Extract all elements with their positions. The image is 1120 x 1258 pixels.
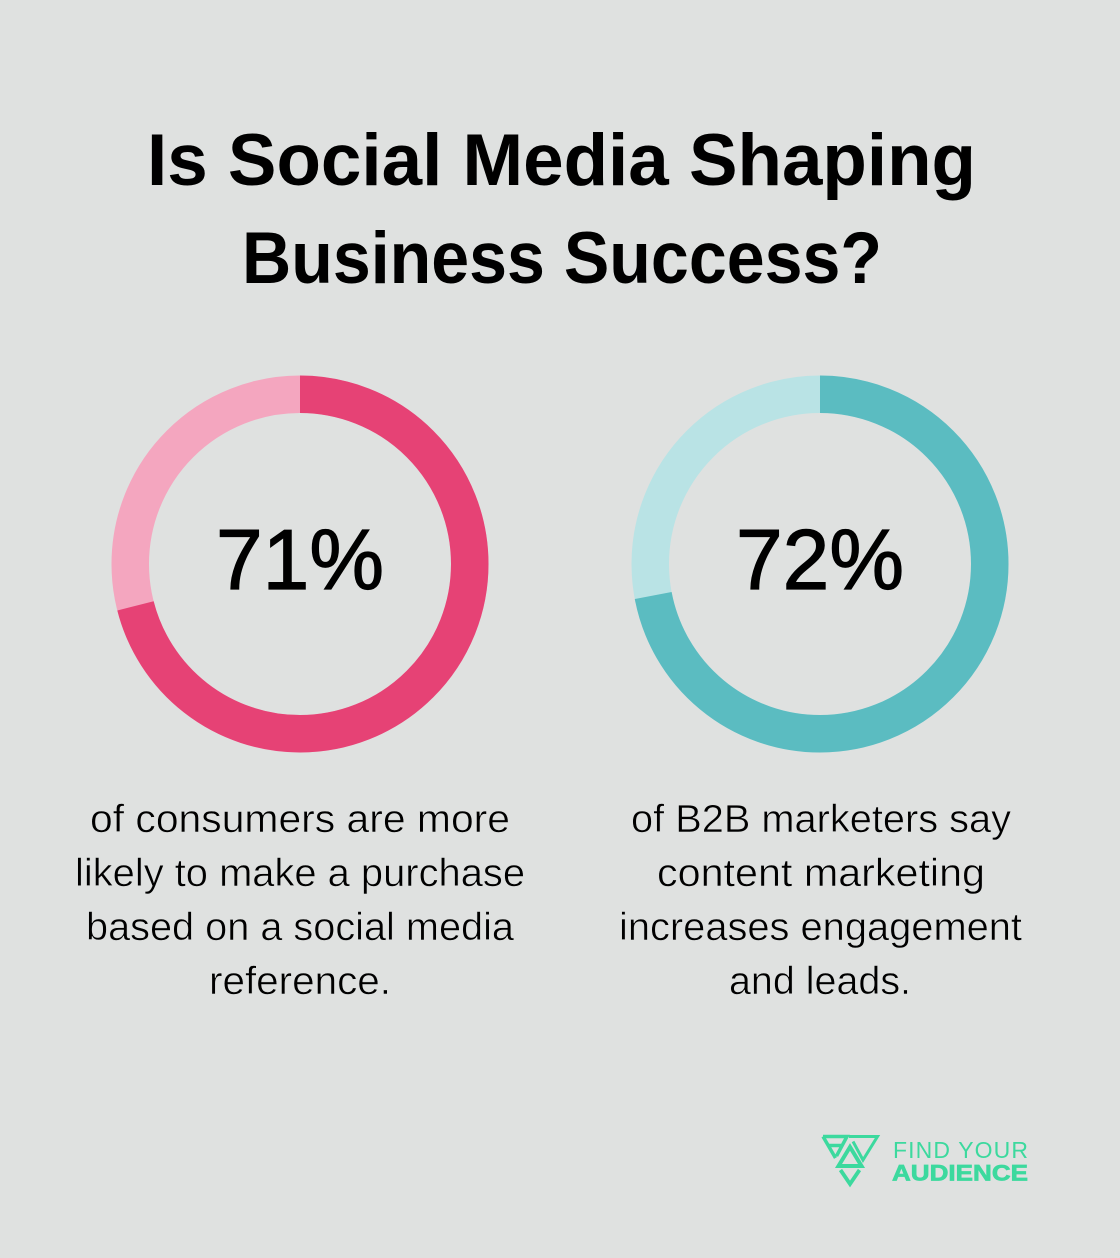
donut chart: 72% xyxy=(650,394,990,734)
panel: 71% consumers xyxy=(75,394,525,1003)
description: consumers: of consumers are more xyxy=(90,798,510,841)
stat: 72%: 72% xyxy=(736,513,904,608)
donut chart: 71% xyxy=(130,394,470,734)
icon: triangle mark xyxy=(823,1136,878,1184)
description: consumers: reference. xyxy=(209,960,391,1003)
logo: Find Your Audience xyxy=(823,1136,1028,1186)
title: Business Success? xyxy=(242,218,882,299)
wordmark xyxy=(892,1137,1028,1186)
wordmark: FIND YOUR xyxy=(893,1137,1028,1163)
stat: 71%: 71% xyxy=(216,513,384,608)
description: consumers: based on a social media xyxy=(86,906,514,949)
description: B2B marketers: and leads. xyxy=(729,960,911,1003)
description: B2B marketers: of B2B marketers say xyxy=(631,798,1012,841)
title xyxy=(147,120,976,299)
description: consumers: likely to make a purchase xyxy=(75,852,525,895)
title: Is Social Media Shaping xyxy=(147,120,976,201)
description: B2B marketers: increases engagement xyxy=(619,906,1022,949)
description: B2B marketers: content marketing xyxy=(657,852,985,895)
description: consumers xyxy=(75,798,525,1003)
panel: 72% B2B marketers xyxy=(619,394,1022,1003)
description: B2B marketers xyxy=(619,798,1022,1003)
wordmark: AUDIENCE xyxy=(892,1160,1028,1186)
